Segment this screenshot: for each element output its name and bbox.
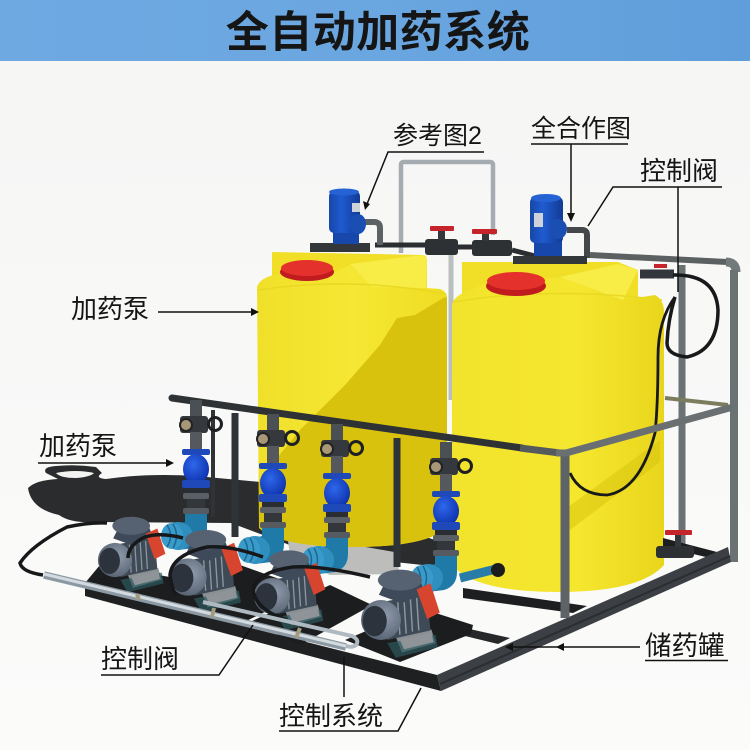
tank nozzle <box>491 563 505 577</box>
label: reference figure 2: 参考图2 <box>393 122 482 150</box>
valve stack 2 <box>238 414 298 564</box>
motor 1 <box>98 517 165 592</box>
label: full cooperation figure <box>531 115 631 222</box>
tank: right <box>452 262 664 592</box>
support post behind tanks <box>448 255 454 400</box>
label: control valve lower: 控制阀 <box>101 644 179 674</box>
back loop pipe <box>401 162 493 253</box>
title: 全自动加药系统 <box>226 9 530 57</box>
red cap: right <box>486 276 546 296</box>
label: reference figure 2 <box>363 122 484 210</box>
steel pipe <box>44 574 357 647</box>
label: storage tank: 储药罐 <box>645 631 724 661</box>
label: control valve upper <box>588 156 722 292</box>
pump sets <box>98 400 505 658</box>
outlet to tank <box>460 569 496 578</box>
label: storage tank <box>505 631 728 661</box>
dosing pump: left <box>310 188 370 252</box>
black hoses <box>20 523 370 620</box>
front railing <box>172 398 733 618</box>
motor 2 <box>169 530 243 612</box>
ground shadow <box>28 465 441 575</box>
outlet valve and black hose <box>570 264 718 495</box>
label: control system <box>279 657 421 731</box>
title bar <box>0 0 750 61</box>
ball valves: top <box>425 226 512 256</box>
label: control valve lower <box>101 625 253 675</box>
motor 3 <box>254 550 325 630</box>
valve stack 1 <box>161 400 222 550</box>
label: dosing pump lower: 加药泵 <box>39 431 117 461</box>
label: dosing pump upper: 加药泵 <box>71 294 149 324</box>
dosing pump: right <box>513 194 587 264</box>
valve stack 3 <box>302 424 362 574</box>
valve stack 4 <box>411 442 472 592</box>
label: control system: 控制系统 <box>279 701 383 731</box>
label: control valve upper: 控制阀 <box>640 156 718 186</box>
motor 4 <box>361 570 440 658</box>
tank: left <box>257 252 447 547</box>
top process piping <box>363 222 736 562</box>
label: dosing pump lower <box>38 431 174 467</box>
motor skid plates <box>85 565 473 662</box>
label: dosing pump upper <box>71 294 259 324</box>
red cap: left <box>280 263 334 281</box>
label: full cooperation figure: 全合作图 <box>531 115 631 143</box>
drain valve bottom right <box>656 530 694 558</box>
base frame <box>85 538 731 691</box>
